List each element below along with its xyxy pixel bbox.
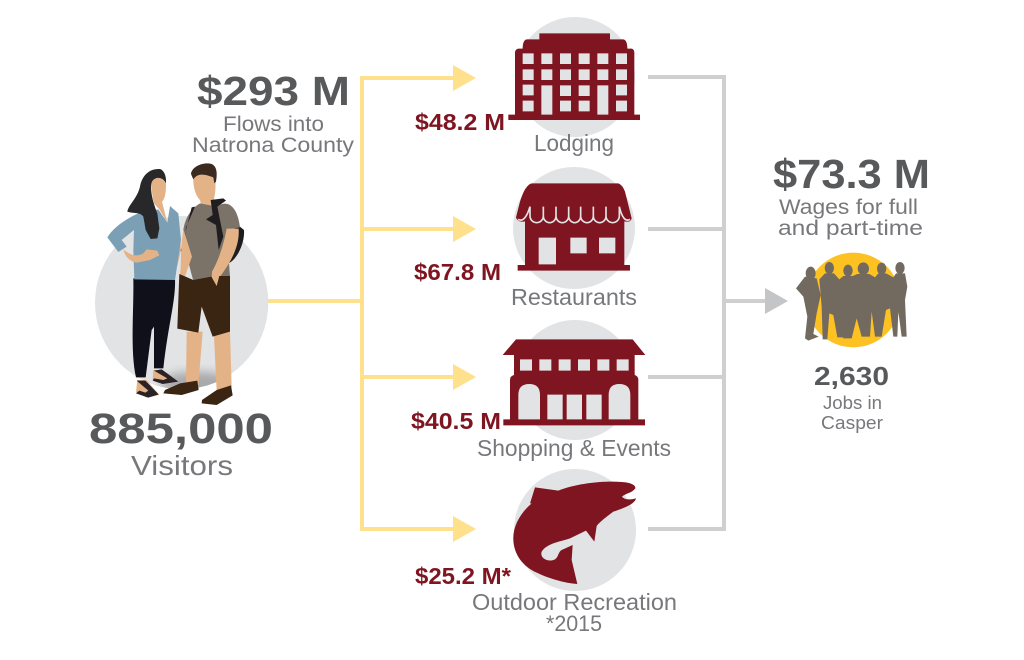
woman [107, 169, 181, 398]
panel: shopping and events [411, 320, 671, 461]
label: Shopping & Events [477, 435, 671, 461]
amount: $25.2 M* [415, 563, 511, 589]
visitors illustration [95, 163, 268, 405]
yellow flow connector [268, 65, 476, 542]
wages headline: $73.3 M [773, 151, 930, 197]
restaurants circle [513, 167, 635, 289]
footnote: *2015 [546, 611, 602, 636]
outdoor circle [514, 469, 636, 591]
headline: 293 M [192, 68, 355, 157]
panel: lodging [415, 17, 640, 156]
gray wages connector [648, 77, 788, 529]
visitors total [89, 405, 273, 481]
wages headline: Wages for full [779, 196, 918, 219]
headline: 293 M: Flows into [223, 113, 324, 136]
man [163, 163, 244, 405]
icon: storefront [516, 183, 632, 271]
visitors total: 885,000 [89, 405, 273, 453]
jobs count: 2,630 [814, 361, 889, 391]
amount: $40.5 M [411, 408, 501, 434]
jobs count: Casper [821, 413, 883, 433]
icon: hotel [508, 33, 640, 120]
wages headline: and part-time [778, 217, 923, 240]
wages headline [773, 151, 930, 240]
icon: shop building [503, 339, 645, 425]
panel: restaurants [414, 167, 637, 310]
icon: workers group [796, 253, 907, 347]
amount: $48.2 M [415, 109, 505, 135]
shopping circle [515, 320, 635, 440]
label: Lodging [534, 130, 614, 156]
backdrop circle [95, 216, 268, 389]
panel: outdoor recreation [415, 469, 677, 636]
yellow circle [806, 253, 901, 347]
headline: 293 M: Natrona County [192, 134, 355, 157]
icon: leaping fish [513, 482, 636, 584]
label: Outdoor Recreation [472, 589, 677, 615]
amount: $67.8 M [414, 259, 501, 285]
headline: 293 M: $293 M [197, 68, 350, 114]
ground shadow [156, 367, 216, 388]
visitors total: Visitors [131, 450, 233, 481]
jobs count [814, 361, 889, 433]
lodging circle [515, 17, 635, 137]
silhouettes [796, 262, 907, 341]
label: Restaurants [511, 284, 637, 310]
jobs count: Jobs in [823, 393, 882, 413]
